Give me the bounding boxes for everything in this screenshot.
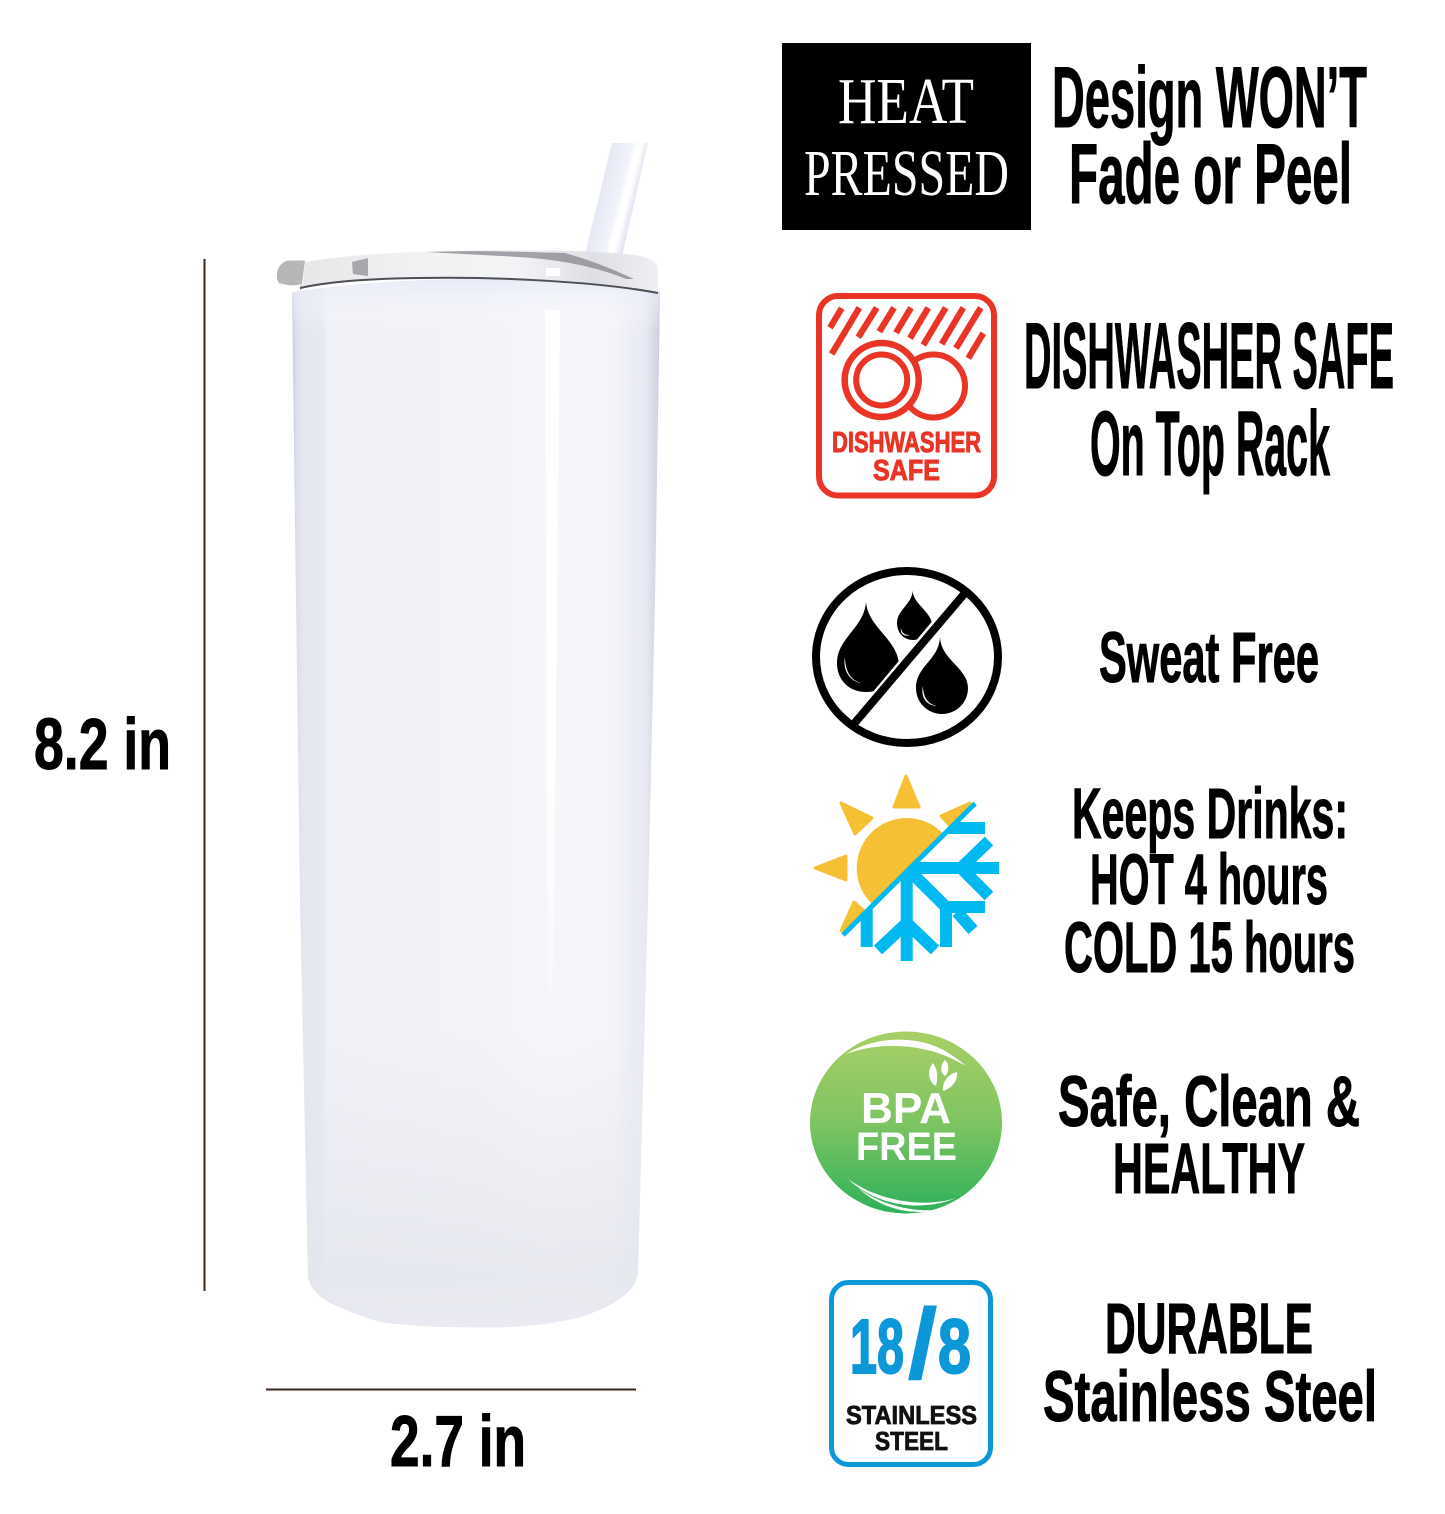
heat pressed badge: PRESSED — [804, 137, 1009, 210]
feature: stainless steel — [832, 1282, 1377, 1464]
icon: 18/8 stainless: 18 — [850, 1304, 904, 1390]
icon: bpa free badge — [810, 1032, 1002, 1214]
feature: sweat free — [816, 571, 1319, 743]
icon: dishwasher safe: SAFE — [873, 455, 940, 487]
icon: 18/8 stainless — [832, 1282, 990, 1464]
icon: 18/8 stainless: STAINLESS — [846, 1400, 977, 1430]
icon: dishwasher safe: DISHWASHER — [832, 427, 981, 459]
dishwasher text — [1024, 303, 1394, 495]
icon: no sweat drops — [816, 571, 998, 743]
icon: bpa free badge: BPA — [861, 1084, 951, 1133]
dimension: height line — [204, 259, 206, 1291]
feature: dishwasher safe — [819, 296, 1394, 496]
icon: leaves — [929, 1060, 957, 1091]
feature: heat pressed — [782, 43, 1367, 230]
feature: keeps drinks — [815, 775, 1355, 988]
icon: sun and snowflake — [815, 776, 999, 961]
icon: bpa free badge: FREE — [856, 1125, 957, 1169]
heat pressed badge: HEAT — [838, 65, 974, 138]
dimension: width line — [266, 1388, 636, 1390]
lid — [277, 250, 658, 293]
keeps drinks text — [1064, 775, 1355, 988]
lid tab — [277, 260, 305, 290]
icon: 18/8 stainless: / — [907, 1288, 938, 1400]
dimension: width label: 2.7 in — [390, 1402, 526, 1482]
stainless text: DURABLE — [1105, 1290, 1313, 1369]
icon: 18/8 stainless: 8 — [938, 1304, 971, 1390]
heat pressed badge — [782, 43, 1031, 230]
bpa text — [1058, 1063, 1360, 1209]
stainless text — [1043, 1290, 1377, 1437]
body highlight — [545, 310, 560, 1030]
icon: 18/8 stainless: STEEL — [875, 1426, 948, 1456]
feature: bpa free — [810, 1032, 1360, 1214]
lid reflections — [427, 251, 634, 279]
bpa text: HEALTHY — [1113, 1130, 1305, 1209]
tumbler — [277, 143, 660, 1328]
tumbler body — [292, 279, 660, 1328]
straw — [585, 143, 648, 256]
icon: dishwasher safe — [819, 296, 994, 496]
lid seam — [300, 278, 658, 293]
heat pressed text — [1052, 50, 1367, 222]
dimension: height label: 8.2 in — [34, 705, 171, 785]
